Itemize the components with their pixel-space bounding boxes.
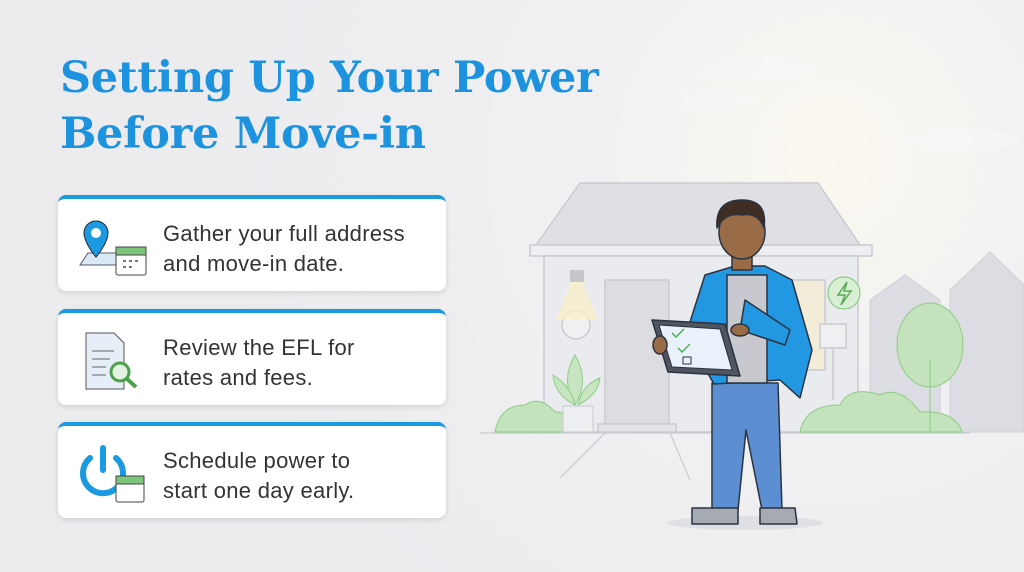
text: review: Review the EFL for (163, 335, 355, 360)
person (652, 200, 823, 530)
text: gather (163, 221, 405, 276)
house (530, 183, 872, 432)
lamp glow (556, 280, 598, 320)
icon: power symbol with calendar (80, 445, 144, 502)
text: gather: and move-in date. (163, 251, 344, 276)
clouds (680, 56, 1020, 152)
text: schedule (163, 448, 354, 503)
card 1: address and date (58, 195, 446, 291)
text: review: rates and fees. (163, 365, 313, 390)
energy icon (828, 277, 860, 309)
text: schedule: start one day early. (163, 478, 354, 503)
background houses (870, 252, 1024, 432)
plant (553, 355, 600, 405)
title: Before Move-in (60, 109, 426, 159)
card 2: review EFL (58, 309, 446, 405)
ground line and path (480, 433, 970, 480)
text: schedule: Schedule power to (163, 448, 350, 473)
icon: document with magnifier (86, 332, 138, 390)
text: gather: Gather your full address (163, 221, 405, 246)
icon: map pin with calendar (79, 220, 146, 276)
card 3: schedule power (58, 422, 446, 518)
title: Setting Up Your Power (60, 53, 598, 103)
bushes (495, 303, 963, 432)
text: review (163, 335, 355, 390)
title (60, 53, 600, 159)
